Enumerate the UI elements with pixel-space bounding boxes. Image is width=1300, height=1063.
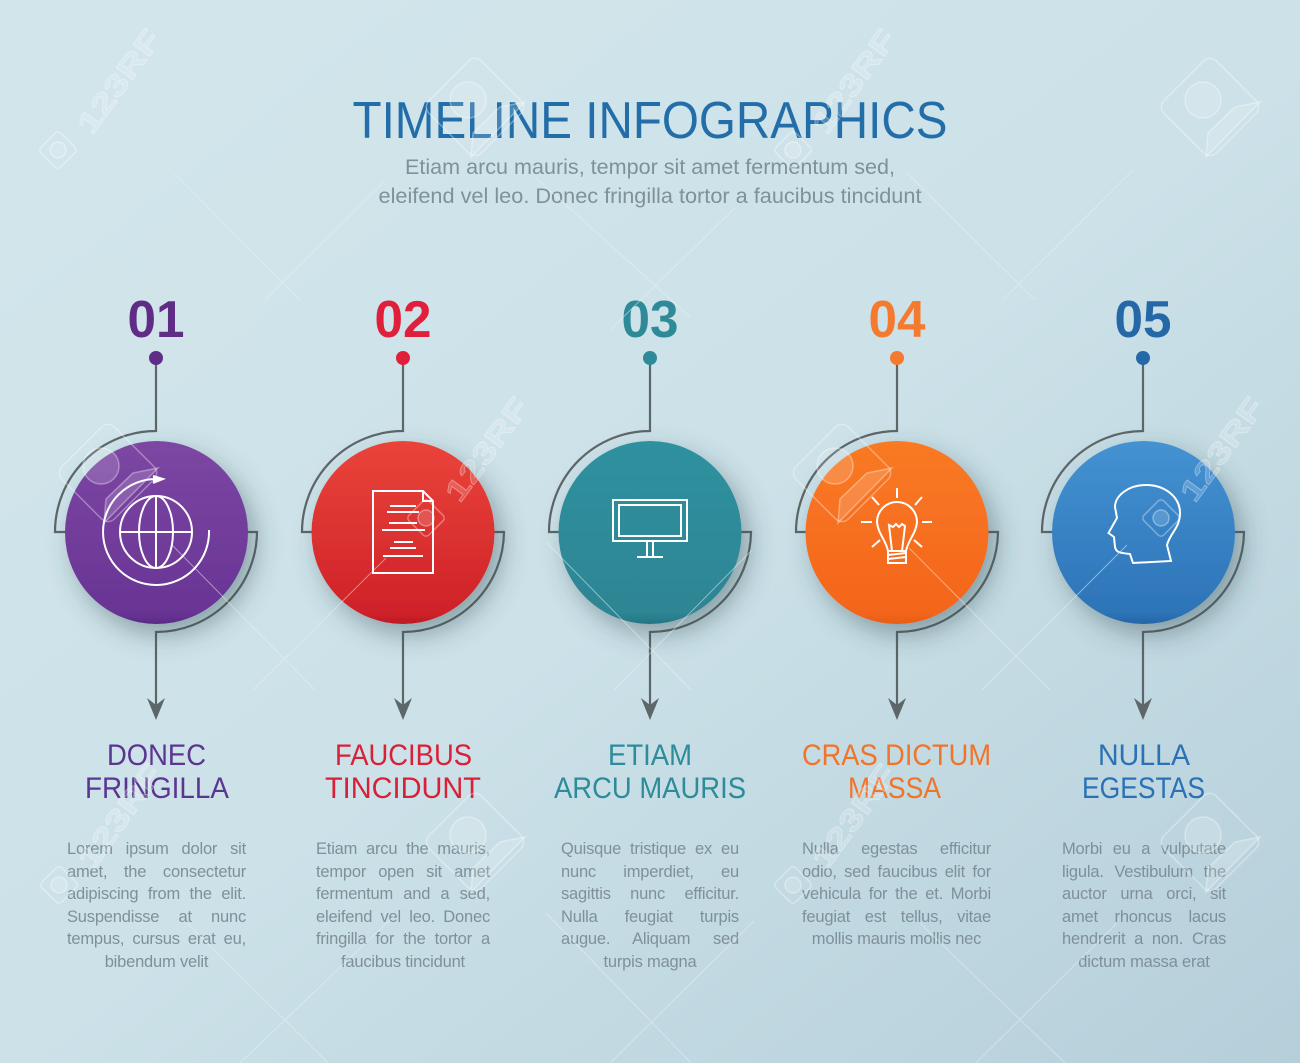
body text 04: Nulla egestas efficitur: [802, 840, 991, 858]
body text 05: hendrerit a non. Cras: [1062, 930, 1226, 948]
circle 03: [558, 441, 742, 624]
heading 02: FAUCIBUS: [335, 739, 472, 772]
body text 05: ligula. Vestibulum the: [1062, 862, 1226, 880]
heading 05: [1082, 739, 1205, 805]
dot 01: [149, 351, 163, 365]
body text 01: [67, 840, 246, 970]
body text 02: faucibus tincidunt: [341, 952, 465, 970]
icon: globe with rotating arrow: [103, 476, 209, 585]
icon: document: [373, 491, 433, 573]
number 01: 01: [128, 291, 184, 349]
body text 05: auctor urna orci, sit: [1062, 885, 1226, 903]
circle 01: [65, 441, 248, 624]
body text 04: [802, 840, 991, 948]
body text 02: tempor open sit amet: [316, 862, 490, 880]
circle 04: [806, 441, 988, 624]
number 04: 04: [868, 291, 926, 349]
watermark overlay: 123RF: [1174, 392, 1271, 508]
body text 03: turpis magna: [604, 952, 696, 970]
step 01: [55, 291, 257, 720]
watermark overlay: 123RF: [439, 392, 536, 508]
heading 01: [85, 739, 229, 805]
heading 03: ARCU MAURIS: [554, 772, 746, 805]
connector and arrow 03: [549, 360, 751, 705]
body text 01: tempus, cursus erat eu,: [67, 930, 246, 948]
body text 02: eleifend vel leo. Donec: [316, 908, 490, 926]
connector and arrow 05: [1042, 360, 1244, 705]
body text 02: Etiam arcu the mauris,: [316, 840, 490, 858]
body text 04: feugiat est tellus, vitae: [802, 908, 991, 926]
dot 02: [396, 351, 410, 365]
body text 04: mollis mauris mollis nec: [812, 930, 981, 948]
number 05: 05: [1114, 291, 1172, 349]
number 03: 03: [622, 291, 678, 349]
icon: light bulb: [861, 488, 932, 563]
step 04: [796, 291, 998, 720]
body text 02: fringilla for the tortor a: [316, 930, 490, 948]
connector and arrow 01: [55, 360, 257, 705]
body text 02: [316, 840, 490, 970]
dot 05: [1136, 351, 1150, 365]
body text 03: Nulla feugiat turpis: [561, 908, 739, 926]
step 03: [549, 291, 751, 720]
heading 04: MASSA: [848, 772, 941, 805]
dot 04: [890, 351, 904, 365]
arrow head 03: [641, 698, 659, 720]
body text 01: amet, the consectetur: [67, 862, 246, 880]
circle 05: [1052, 441, 1235, 624]
body text 03: [561, 840, 739, 970]
connector and arrow 04: [796, 360, 998, 705]
number 02: 02: [374, 291, 432, 349]
watermark overlay: 123RF: [72, 759, 169, 875]
subtitle: eleifend vel leo. Donec fringilla tortor a faucibus tincidunt: [378, 185, 922, 208]
step 02: [302, 291, 504, 720]
body text 03: nunc imperdiet, eu: [561, 862, 739, 880]
body text 05: [1062, 840, 1226, 970]
circle 02: [312, 441, 494, 624]
heading 04: CRAS DICTUM: [802, 739, 991, 772]
heading 03: [554, 739, 746, 805]
heading 01: DONEC: [107, 739, 206, 772]
title: TIMELINE INFOGRAPHICS: [352, 92, 948, 150]
connector and arrow 02: [302, 360, 504, 705]
body text 01: Suspendisse at nunc: [67, 908, 246, 926]
arrow head 05: [1134, 698, 1152, 720]
icon: head: [1108, 485, 1180, 563]
icon: monitor: [613, 500, 687, 557]
body text 05: Morbi eu a vulputate: [1062, 840, 1226, 858]
body text 01: Lorem ipsum dolor sit: [67, 840, 246, 858]
subtitle: [378, 156, 922, 208]
body text 02: fermentum and a sed,: [316, 885, 490, 903]
dot 03: [643, 351, 657, 365]
heading 03: ETIAM: [608, 739, 692, 772]
heading 04: [802, 739, 991, 805]
body text 03: sagittis nunc efficitur.: [561, 885, 739, 903]
body text 04: odio, sed faucibus elit for: [802, 862, 991, 880]
body text 01: bibendum velit: [105, 952, 208, 970]
heading 01: FRINGILLA: [85, 772, 229, 805]
body text 03: augue. Aliquam sed: [561, 930, 739, 948]
step 05: [1042, 291, 1244, 720]
body text 01: adipiscing from the elit.: [67, 885, 246, 903]
heading 05: EGESTAS: [1082, 772, 1205, 805]
body text 05: amet rhoncus lacus: [1062, 908, 1226, 926]
subtitle: Etiam arcu mauris, tempor sit amet fermentum sed,: [405, 156, 895, 179]
body text 03: Quisque tristique ex eu: [561, 840, 739, 858]
watermark overlay: 123RF: [806, 24, 903, 140]
body text 04: vehicula for the et. Morbi: [802, 885, 991, 903]
heading 05: NULLA: [1098, 739, 1190, 772]
body text 05: dictum massa erat: [1078, 952, 1210, 970]
heading 02: [325, 739, 481, 805]
watermark overlay: 123RF: [71, 24, 168, 140]
arrow head 04: [888, 698, 906, 720]
arrow head 02: [394, 698, 412, 720]
arrow head 01: [147, 698, 165, 720]
watermark overlay: 123RF: [806, 759, 903, 875]
heading 02: TINCIDUNT: [325, 772, 481, 805]
